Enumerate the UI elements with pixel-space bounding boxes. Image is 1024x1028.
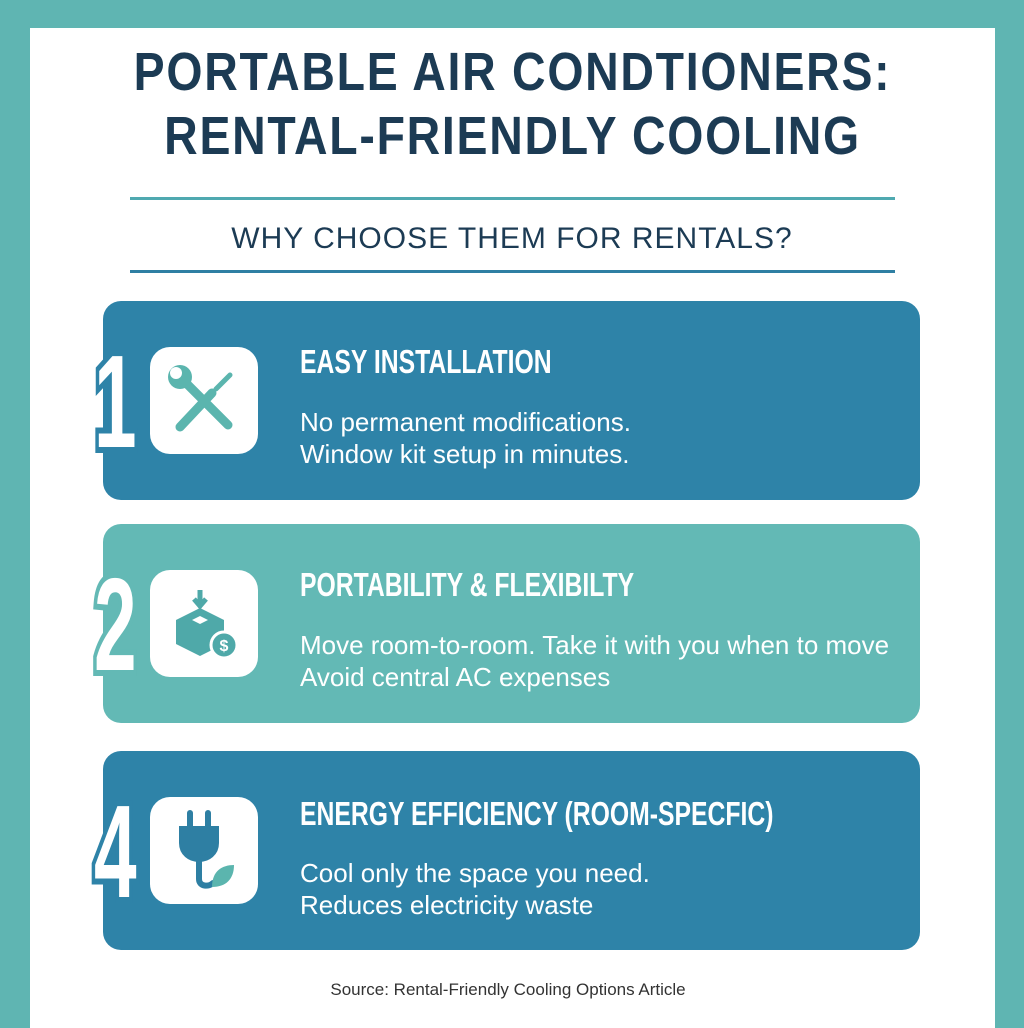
description: No permanent modifications.	[300, 407, 631, 437]
number 1: 1	[94, 328, 137, 475]
heading: PORTABILITY & FLEXIBILTY	[300, 566, 634, 603]
title: PORTABLE AIR CONDTIONERS:	[133, 42, 891, 102]
description	[300, 630, 889, 692]
description: Avoid central AC expenses	[300, 662, 610, 692]
title: RENTAL-FRIENDLY COOLING	[164, 106, 860, 166]
subtitle: WHY CHOOSE THEM FOR RENTALS?	[231, 222, 793, 255]
description	[300, 407, 631, 469]
source: Source: Rental-Friendly Cooling Options Article	[330, 980, 686, 999]
number 2: 2	[94, 551, 137, 698]
icon: tools	[150, 347, 258, 454]
description: Move room-to-room. Take it with you when to move	[300, 630, 889, 660]
heading: ENERGY EFFICIENCY (ROOM-SPECFIC)	[300, 795, 774, 832]
number 4: 4	[94, 778, 137, 925]
panel: easy installation	[103, 301, 920, 500]
description: Cool only the space you need.	[300, 858, 650, 888]
panel: energy	[103, 751, 920, 950]
description	[300, 858, 650, 920]
icon: plug	[150, 797, 258, 904]
heading: EASY INSTALLATION	[300, 343, 552, 380]
panel: portability	[103, 524, 920, 723]
description: Window kit setup in minutes.	[300, 439, 629, 469]
icon: box	[150, 570, 258, 677]
description: Reduces electricity waste	[300, 890, 593, 920]
title	[133, 42, 891, 166]
icon: box: $	[220, 638, 229, 655]
